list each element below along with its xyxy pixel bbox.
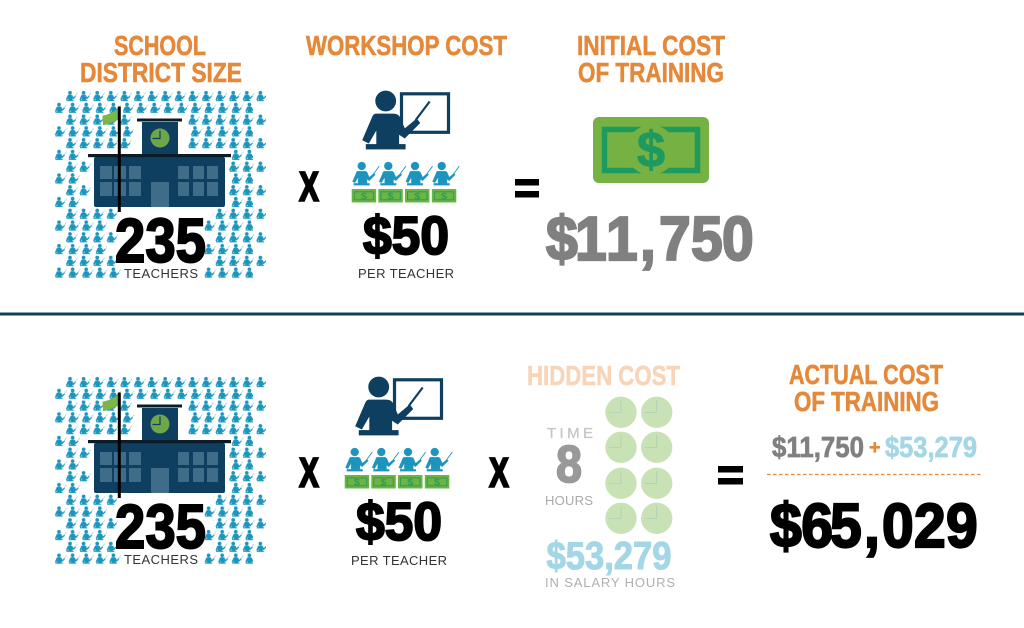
number: 235 teachers: 235: [115, 207, 206, 276]
number: 50 dollars per teacher: PER TEACHER: [358, 266, 454, 281]
number: salary hours: $53,279: [546, 535, 672, 578]
number: 235 teachers: TEACHERS: [124, 266, 198, 281]
icon: dollar bill: [593, 117, 709, 183]
operator: equals: [515, 179, 539, 198]
icon: workshop presenter with attendees and bills, lower row: [345, 377, 452, 489]
text: 8 hours of time: HOURS: [545, 493, 593, 508]
title: school district size: DISTRICT SIZE: [80, 57, 242, 88]
text: 8 hours of time: [545, 425, 593, 508]
title: actual cost of training: [789, 359, 943, 417]
title: initial cost of training: INITIAL COST: [577, 30, 725, 61]
title: initial cost of training: [577, 30, 725, 88]
title: actual cost of training: OF TRAINING: [794, 386, 939, 417]
heading: hidden cost: HIDDEN COST: [527, 360, 680, 391]
icon: dollar bill: $: [637, 122, 665, 178]
divider: dashed sum line: [767, 474, 983, 476]
number: 235 teachers, lower row: TEACHERS: [124, 552, 198, 567]
title: initial cost of training: OF TRAINING: [578, 57, 724, 88]
number: 50 dollars per teacher, lower row: $50: [356, 492, 442, 552]
title: actual cost of training: ACTUAL COST: [789, 359, 943, 390]
number: salary hours: IN SALARY HOURS: [545, 575, 675, 590]
number: 50 dollars per teacher, lower row: PER TEACHER: [351, 553, 447, 568]
text: 8 hours of time: TIME: [547, 425, 593, 442]
operator: multiply, lower row: X: [300, 450, 318, 496]
operator: multiply: X: [300, 164, 318, 210]
icon: teacher crowd with school building, lower row: [53, 377, 266, 565]
text: 8 hours of time: 8: [556, 436, 582, 494]
number: initial cost total: $11,750: [546, 204, 754, 274]
title: school district size: [80, 30, 242, 88]
divider: [0, 312, 1024, 316]
icon: teacher crowd with school building: [53, 91, 266, 279]
sum: initial plus hidden cost: $11,750: [772, 432, 864, 464]
icon: eight clocks: [605, 397, 672, 534]
sum: initial plus hidden cost: [772, 432, 977, 464]
number: 235 teachers, lower row: 235: [115, 493, 206, 562]
icon: workshop presenter with attendees and bills: [352, 91, 459, 203]
title: school district size: SCHOOL: [114, 30, 206, 61]
operator: multiply, before hidden cost: X: [490, 450, 508, 496]
title: workshop cost: WORKSHOP COST: [306, 30, 507, 61]
number: actual cost total: $65,029: [770, 491, 978, 561]
sum: initial plus hidden cost: $53,279: [885, 432, 977, 464]
operator: equals, lower row: [718, 466, 743, 484]
panel: hidden cost: [527, 360, 680, 590]
number: 50 dollars per teacher: $50: [363, 206, 449, 266]
